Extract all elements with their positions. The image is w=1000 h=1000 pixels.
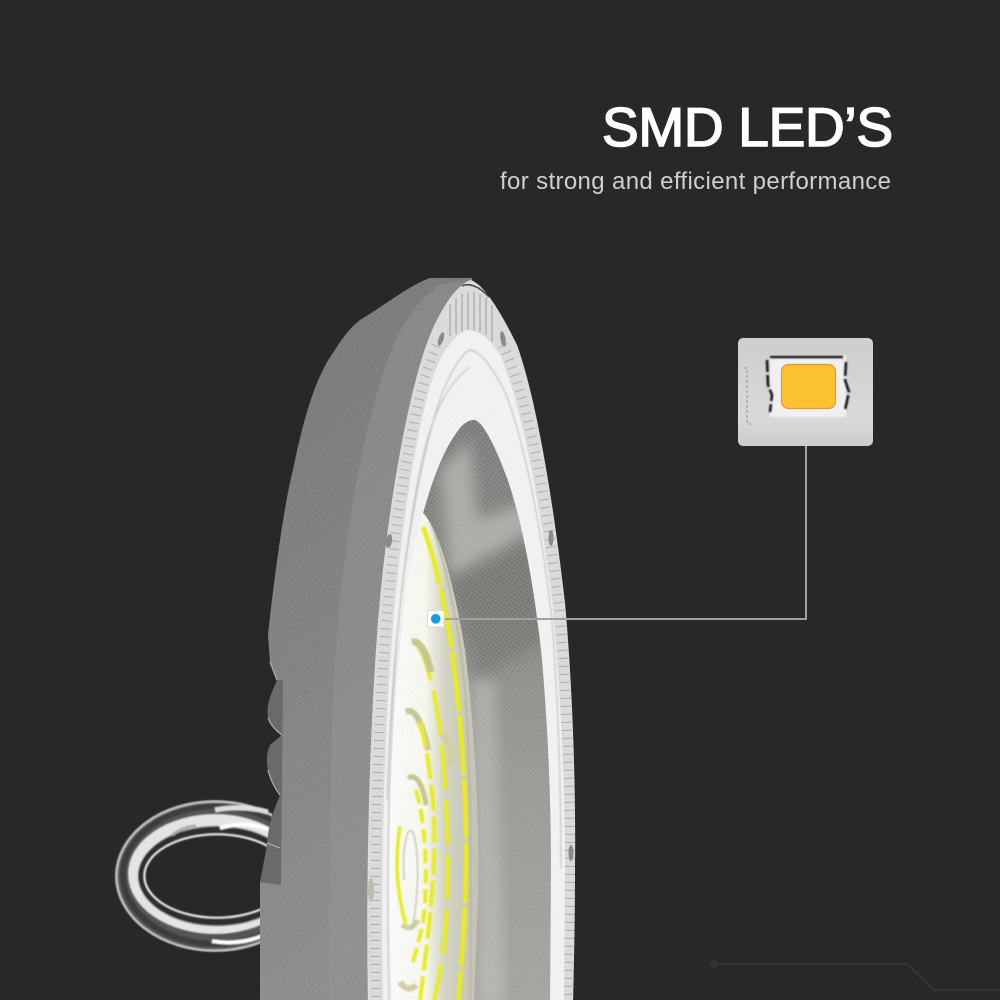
- pad marks: [744, 368, 752, 424]
- fin edge highlights: [267, 662, 282, 848]
- chip frame: [770, 355, 846, 417]
- SMD LED chip card: [738, 338, 873, 446]
- interior mesh and light band: [424, 420, 551, 1000]
- card base: [738, 338, 873, 446]
- white stepped reflector ring: [382, 330, 565, 1000]
- hanging ring: [114, 799, 272, 953]
- rim top shadow groove: [462, 285, 489, 297]
- black chip outline: [767, 357, 849, 412]
- LED emitter: [782, 364, 836, 408]
- subtitle: for strong and efficient performance: [500, 168, 891, 195]
- connector marker: [428, 610, 444, 627]
- rim tick marks: [375, 292, 570, 1000]
- lamp: high bay LED fixture: [115, 278, 575, 1000]
- title: SMD LED’S: [602, 96, 893, 158]
- reflector ring contours: [387, 350, 561, 1000]
- rim mounting holes: [368, 331, 574, 902]
- reflector interior: [389, 420, 551, 1000]
- rear cooling fins: [260, 650, 290, 890]
- LED plate: [389, 513, 478, 1000]
- front rim: [367, 280, 575, 1000]
- connector line: [445, 446, 806, 619]
- LED rings: [397, 520, 471, 1000]
- decorative circuit line: [710, 960, 1000, 990]
- housing: [260, 278, 480, 1000]
